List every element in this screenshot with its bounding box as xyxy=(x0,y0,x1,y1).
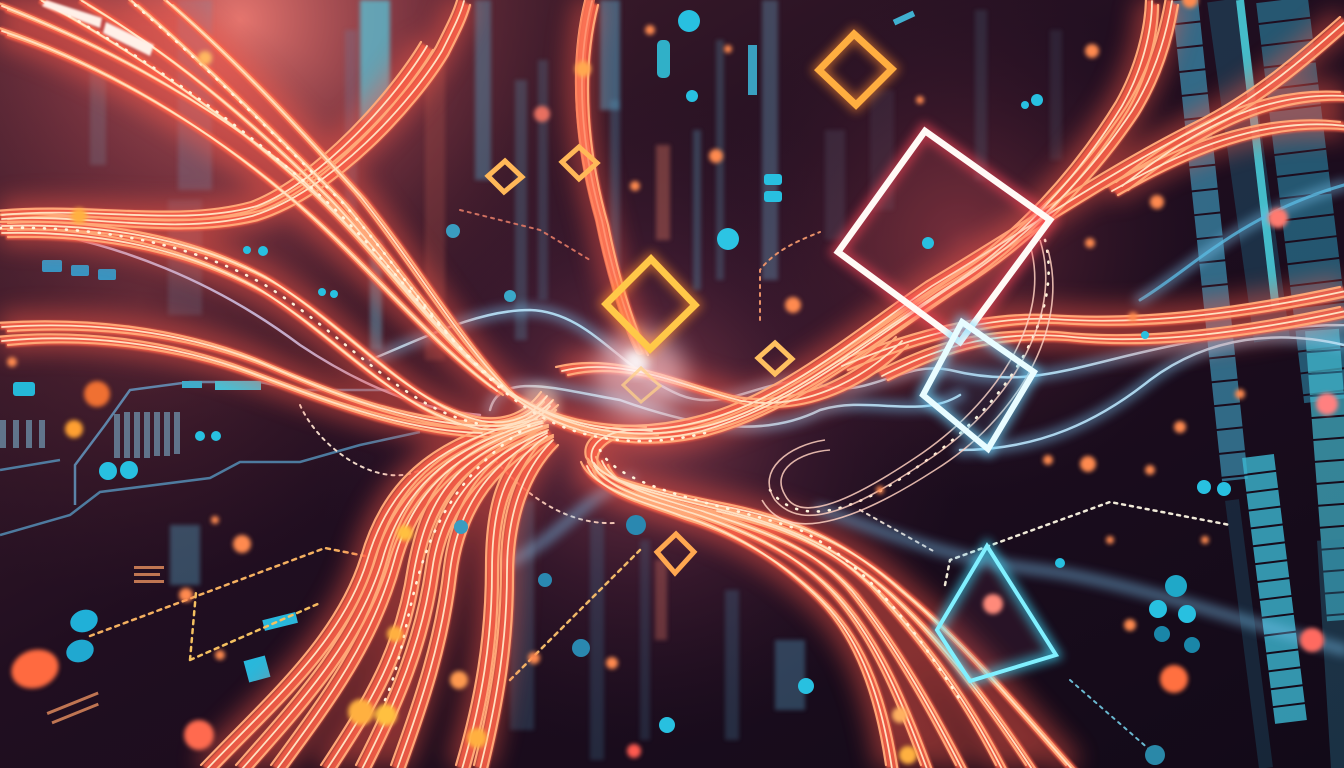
small data glyph clusters xyxy=(47,566,164,724)
background data columns xyxy=(90,0,1062,760)
right teal data towers xyxy=(1185,0,1344,768)
blue waves xyxy=(0,185,1344,650)
cyan triangle xyxy=(937,546,1056,681)
large white diamond xyxy=(838,131,1050,342)
amber diamonds xyxy=(488,34,892,573)
blue-white diamond xyxy=(923,322,1034,449)
left circuit blocks xyxy=(0,260,298,682)
central flare xyxy=(520,329,686,425)
vertical top ribbon xyxy=(580,0,640,350)
top-left light streaks xyxy=(42,0,154,56)
right loop strand xyxy=(762,240,1053,524)
dotted ribbon highlights xyxy=(0,5,1049,700)
left circuit traces xyxy=(0,382,420,535)
dashed connectors xyxy=(90,210,1230,750)
